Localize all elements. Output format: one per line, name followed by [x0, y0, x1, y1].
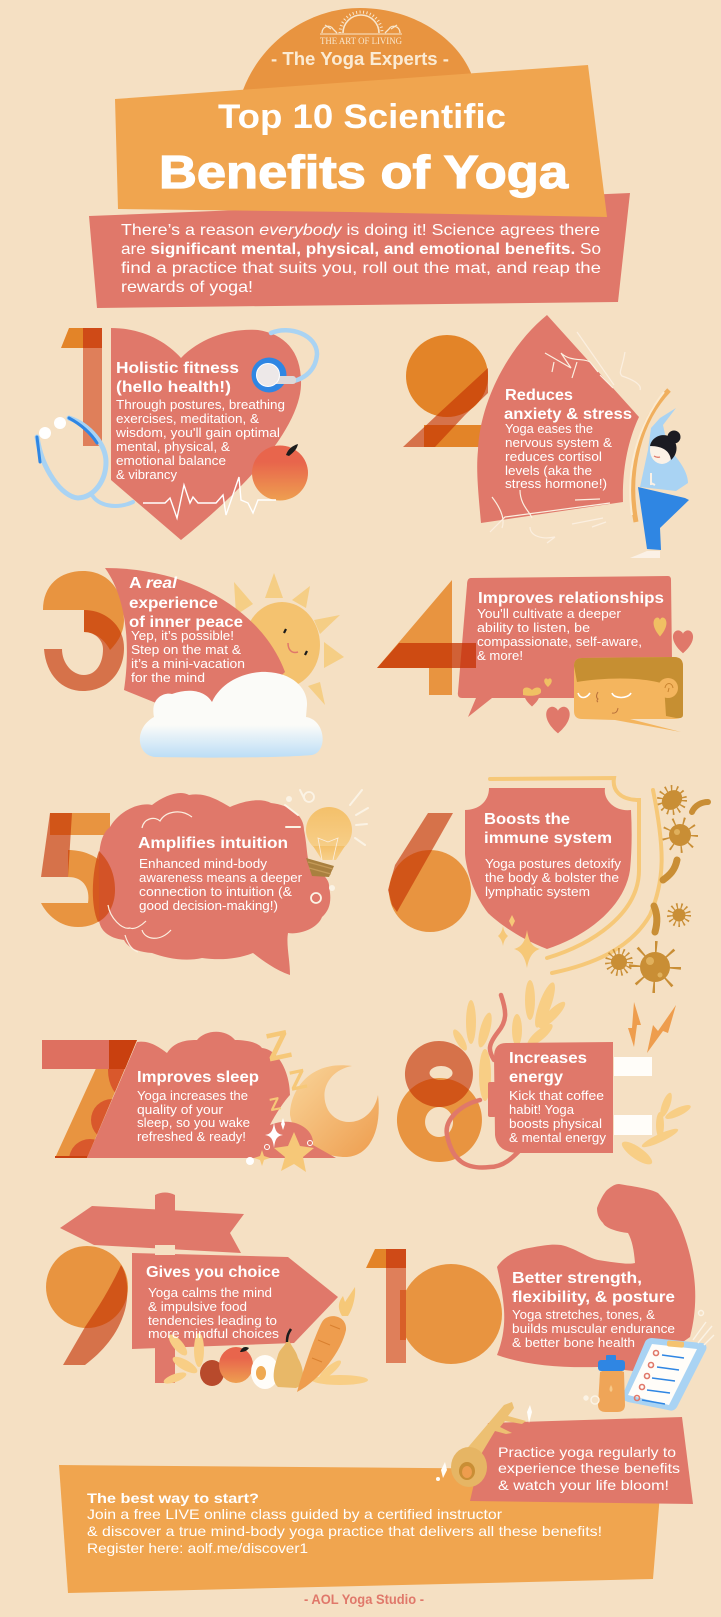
germ cell	[658, 786, 686, 814]
stress crack lines	[490, 332, 640, 543]
Z letters: Z	[267, 1093, 282, 1115]
text 9: Gives you choice	[146, 1264, 280, 1281]
call to action text: & discover a true mind-body yoga practice that delivers all these benefits!	[87, 1523, 602, 1539]
text 6: Yoga postures detoxify	[485, 857, 622, 871]
text 10: flexibility, & posture	[512, 1289, 675, 1306]
benefit 6: immune system	[388, 778, 708, 986]
peach	[252, 444, 308, 500]
title line 1: Top 10 Scientific	[218, 98, 506, 136]
brain speech panel	[99, 793, 330, 975]
number 4 crossbar	[377, 643, 476, 668]
benefit 10: strength	[366, 1184, 714, 1412]
light bulb	[285, 790, 368, 903]
text 6: lymphatic system	[485, 885, 590, 899]
intro text: There’s a reason everybody is doing it! Science agrees there	[121, 222, 600, 239]
text 8	[509, 1050, 607, 1145]
number 9	[46, 1246, 128, 1365]
text 8: Increases	[509, 1050, 587, 1067]
text 6: immune system	[484, 830, 612, 847]
tagline: - The Yoga Experts -	[271, 49, 449, 69]
Z letters	[262, 1022, 309, 1115]
callout text: experience these benefits	[498, 1460, 680, 1476]
text 9: & impulsive food	[148, 1300, 247, 1314]
text 1: & vibrancy	[116, 468, 178, 482]
text 2: Yoga eases the	[505, 422, 593, 436]
intro text: find a practice that suits you, roll out the mat, and reap the	[121, 260, 601, 277]
number 7	[42, 1040, 137, 1158]
text 9: tendencies leading to	[148, 1314, 277, 1328]
text 2: nervous system &	[505, 436, 613, 450]
text 5: awareness means a deeper	[139, 871, 302, 885]
text 9: Yoga calms the mind	[148, 1286, 272, 1300]
number 8	[397, 1041, 482, 1162]
text 6: Boosts the	[484, 811, 570, 828]
number 5	[41, 813, 115, 927]
text 7: refreshed & ready!	[137, 1130, 246, 1144]
cloud	[140, 672, 323, 758]
food	[162, 1287, 368, 1392]
stars	[246, 1118, 314, 1172]
virus	[667, 822, 693, 848]
yoga woman	[630, 390, 689, 558]
text 5: good decision-making!)	[139, 899, 278, 913]
text 4: You'll cultivate a deeper	[477, 607, 621, 621]
hearts	[523, 617, 693, 733]
text 3: Step on the mat &	[131, 643, 242, 657]
text 2	[504, 387, 632, 491]
text 1: Holistic fitness	[116, 360, 239, 377]
text 2: Reduces	[505, 387, 573, 404]
intro panel	[89, 193, 630, 308]
panel 2	[477, 315, 639, 523]
text 10: Better strength,	[512, 1270, 642, 1287]
intro text: rewards of yoga!	[121, 279, 253, 296]
leaves	[162, 1332, 368, 1386]
text 9	[146, 1264, 280, 1341]
text 3	[129, 575, 245, 685]
power cord	[447, 995, 522, 1168]
number 1	[61, 328, 102, 446]
text 7	[137, 1069, 259, 1144]
pulse line	[143, 477, 276, 518]
text 10: Yoga stretches, tones, &	[512, 1308, 656, 1322]
call to action text: The best way to start?	[87, 1490, 259, 1506]
number 3	[43, 571, 124, 691]
Z letters: Z	[286, 1063, 309, 1097]
text 2: stress hormone!)	[505, 477, 607, 491]
flexed arm panel	[497, 1184, 695, 1372]
number 2	[403, 335, 492, 447]
signpost	[60, 1192, 338, 1383]
text 1: Through postures, breathing	[116, 398, 285, 412]
text 3: A real	[129, 575, 178, 592]
call to action panel	[59, 1465, 662, 1593]
sun	[234, 573, 344, 705]
key	[436, 1402, 532, 1487]
text 1: wisdom, you'll gain optimal	[115, 426, 280, 440]
benefit 3: inner peace	[43, 568, 344, 758]
logo: The Art of Living: THE ART OF LIVING	[320, 37, 402, 47]
call to action text: Join a free LIVE online class guided by a certified instructor	[87, 1506, 502, 1522]
text 8: Kick that coffee	[509, 1089, 604, 1103]
moon	[290, 1065, 379, 1157]
title banner	[115, 65, 607, 217]
callout text: & watch your life bloom!	[498, 1477, 669, 1493]
text 3: experience	[129, 595, 218, 612]
number 5 overlap	[93, 851, 115, 922]
text 4	[477, 590, 664, 663]
text 5: Amplifies intuition	[138, 835, 288, 852]
text 5: Enhanced mind-body	[139, 857, 268, 871]
spiky germ	[608, 952, 630, 972]
sleep cloud panel	[87, 1032, 336, 1158]
heart panel	[111, 328, 301, 540]
intro text	[121, 222, 601, 296]
text 1: (hello health!)	[116, 379, 231, 396]
text 8: boosts physical	[509, 1117, 602, 1131]
text 7: Improves sleep	[137, 1069, 259, 1086]
practice callout	[470, 1417, 693, 1504]
speech bubble panel	[458, 576, 672, 717]
benefit 1: holistic fitness	[37, 328, 317, 540]
text 5	[138, 835, 302, 913]
text 4: ability to listen, be	[477, 621, 590, 635]
text 3: of inner peace	[129, 614, 243, 631]
number 10	[366, 1249, 502, 1364]
text 8: & mental energy	[509, 1131, 607, 1145]
text 4: & more!	[477, 649, 523, 663]
text 6: the body & bolster the	[485, 871, 619, 885]
clipboard	[623, 1338, 706, 1411]
text 8: energy	[509, 1069, 563, 1086]
small germ	[670, 906, 688, 924]
plug panel	[488, 1042, 652, 1153]
text 3: Yep, it’s possible!	[131, 629, 234, 643]
text 10	[512, 1270, 675, 1350]
header arch	[243, 8, 471, 110]
panel 3	[105, 568, 285, 730]
Z letters: Z	[262, 1022, 295, 1070]
text 3: it’s a mini-vacation	[131, 657, 245, 671]
shield outlines	[490, 778, 662, 973]
callout text: Practice yoga regularly to	[498, 1444, 676, 1460]
sparkle accents	[584, 1310, 714, 1404]
text 2: reduces cortisol	[505, 450, 602, 464]
text 10: & better bone health	[512, 1336, 635, 1350]
brain squiggles	[108, 812, 192, 952]
benefit 9: choice	[46, 1192, 368, 1392]
text 2: anxiety & stress	[504, 406, 632, 423]
text 1: mental, physical, &	[116, 440, 231, 454]
text 9: more mindful choices	[148, 1327, 279, 1341]
text 6	[484, 811, 622, 899]
shield panel	[465, 788, 632, 949]
benefit 4: relationships	[377, 576, 693, 733]
intro text: are significant mental, physical, and emotional benefits. So	[121, 241, 601, 258]
stethoscope	[37, 330, 317, 506]
text 5: connection to intuition (&	[139, 885, 293, 899]
energy bolts	[628, 1002, 676, 1053]
large virus	[636, 948, 674, 986]
callout text	[498, 1444, 680, 1493]
sleeping face bubble	[574, 657, 683, 732]
text 1: emotional balance	[116, 454, 226, 468]
call to action text	[87, 1490, 602, 1556]
text 4: compassionate, self-aware,	[477, 635, 642, 649]
germs	[608, 786, 708, 986]
text 1	[115, 360, 285, 482]
number 6	[388, 813, 471, 932]
title line 2: Benefits of Yoga	[159, 146, 568, 198]
benefit 2: reduces anxiety	[403, 315, 689, 558]
footer: - AOL Yoga Studio -	[304, 1591, 424, 1607]
logo: The Art of Living	[320, 12, 402, 47]
leaves	[451, 980, 692, 1168]
call to action text: Register here: aolf.me/discover1	[87, 1540, 308, 1556]
text 4: Improves relationships	[478, 590, 664, 607]
benefit 7: sleep	[42, 1030, 379, 1172]
text 7: sleep, so you wake	[137, 1116, 250, 1130]
text 10: builds muscular endurance	[512, 1322, 675, 1336]
text 1: exercises, meditation, &	[116, 412, 260, 426]
text 3: for the mind	[131, 671, 205, 685]
benefit 8: energy	[397, 980, 692, 1168]
benefit 5: intuition	[41, 790, 368, 975]
text 7: quality of your	[137, 1103, 223, 1117]
number 4	[377, 580, 452, 695]
sparkles	[498, 915, 540, 968]
text 8: habit! Yoga	[509, 1103, 574, 1117]
water bottle	[598, 1355, 625, 1412]
text 7: Yoga increases the	[137, 1089, 248, 1103]
text 2: levels (aka the	[505, 464, 592, 478]
